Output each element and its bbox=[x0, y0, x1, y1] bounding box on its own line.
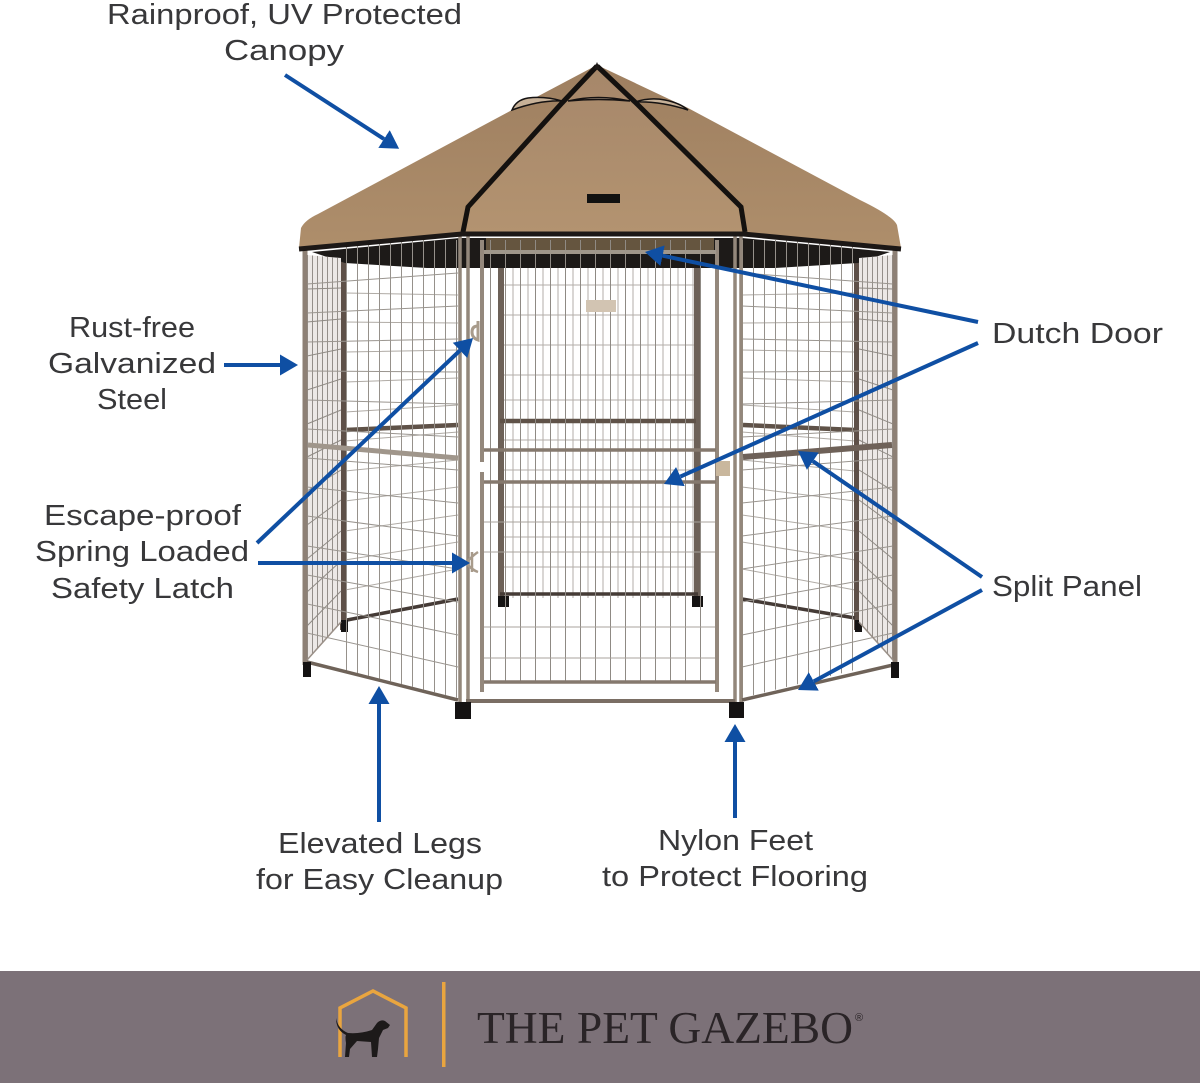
label: elevated legs: for Easy Cleanup bbox=[256, 864, 503, 896]
canopy label bbox=[587, 194, 620, 203]
door latches bbox=[466, 300, 730, 572]
label: safety latch bbox=[35, 500, 249, 605]
arrow: split panel lower bbox=[814, 590, 982, 681]
label: safety latch: Safety Latch bbox=[51, 573, 234, 605]
arrow: nylon feet bbox=[733, 742, 737, 818]
brand name: THE PET GAZEBO bbox=[477, 1003, 853, 1053]
canopy inner lining bbox=[486, 238, 714, 251]
back wire panels bbox=[345, 262, 857, 628]
arrow: upper latch bbox=[257, 350, 460, 543]
label: nylon feet: Nylon Feet bbox=[658, 825, 813, 857]
back posts and rails bbox=[308, 258, 892, 630]
label: dutch door: Dutch Door bbox=[992, 318, 1163, 350]
label: nylon feet: to Protect Flooring bbox=[602, 861, 868, 893]
divider bbox=[442, 982, 446, 1067]
arrow: door top bbox=[663, 256, 978, 322]
label: nylon feet bbox=[602, 825, 868, 893]
label: galvanized steel: Rust-free bbox=[69, 312, 195, 344]
label: elevated legs bbox=[256, 828, 503, 896]
label: galvanized steel: Galvanized bbox=[48, 348, 216, 380]
canopy peak bbox=[594, 62, 600, 69]
corner and door posts bbox=[305, 236, 895, 702]
label: safety latch: Escape-proof bbox=[44, 500, 242, 532]
icon: dog silhouette bbox=[336, 1018, 390, 1057]
canopy top vent bbox=[512, 97, 688, 110]
label: safety latch: Spring Loaded bbox=[35, 536, 249, 568]
canopy straps bbox=[463, 66, 745, 232]
registered mark: ® bbox=[855, 1012, 863, 1024]
canopy bbox=[299, 62, 901, 249]
label: canopy bbox=[107, 0, 462, 67]
label: split panel: Split Panel bbox=[992, 571, 1142, 603]
label: canopy: Canopy bbox=[224, 35, 345, 67]
canopy underside bbox=[312, 238, 890, 268]
canopy front facet bbox=[464, 68, 743, 232]
label: galvanized steel bbox=[48, 312, 216, 416]
canopy hem bbox=[299, 234, 901, 249]
icon: dog house logo bbox=[336, 991, 406, 1057]
arrow: lower latch bbox=[258, 561, 452, 565]
footer band bbox=[0, 971, 1200, 1083]
label: galvanized steel: Steel bbox=[97, 384, 167, 416]
front wire panels bbox=[307, 240, 893, 698]
front feet bbox=[303, 662, 899, 719]
back feet bbox=[341, 596, 862, 632]
arrow: canopy bbox=[285, 75, 384, 139]
arrow: door middle bbox=[680, 343, 978, 477]
door rails and bars bbox=[307, 252, 893, 701]
label: elevated legs: Elevated Legs bbox=[278, 828, 482, 860]
arrow: galvanized steel bbox=[224, 363, 280, 367]
arrow: split panel upper bbox=[813, 461, 982, 577]
arrow: elevated legs bbox=[377, 704, 381, 822]
side wire panels bbox=[307, 255, 893, 660]
illustration: pet gazebo bbox=[299, 62, 901, 719]
